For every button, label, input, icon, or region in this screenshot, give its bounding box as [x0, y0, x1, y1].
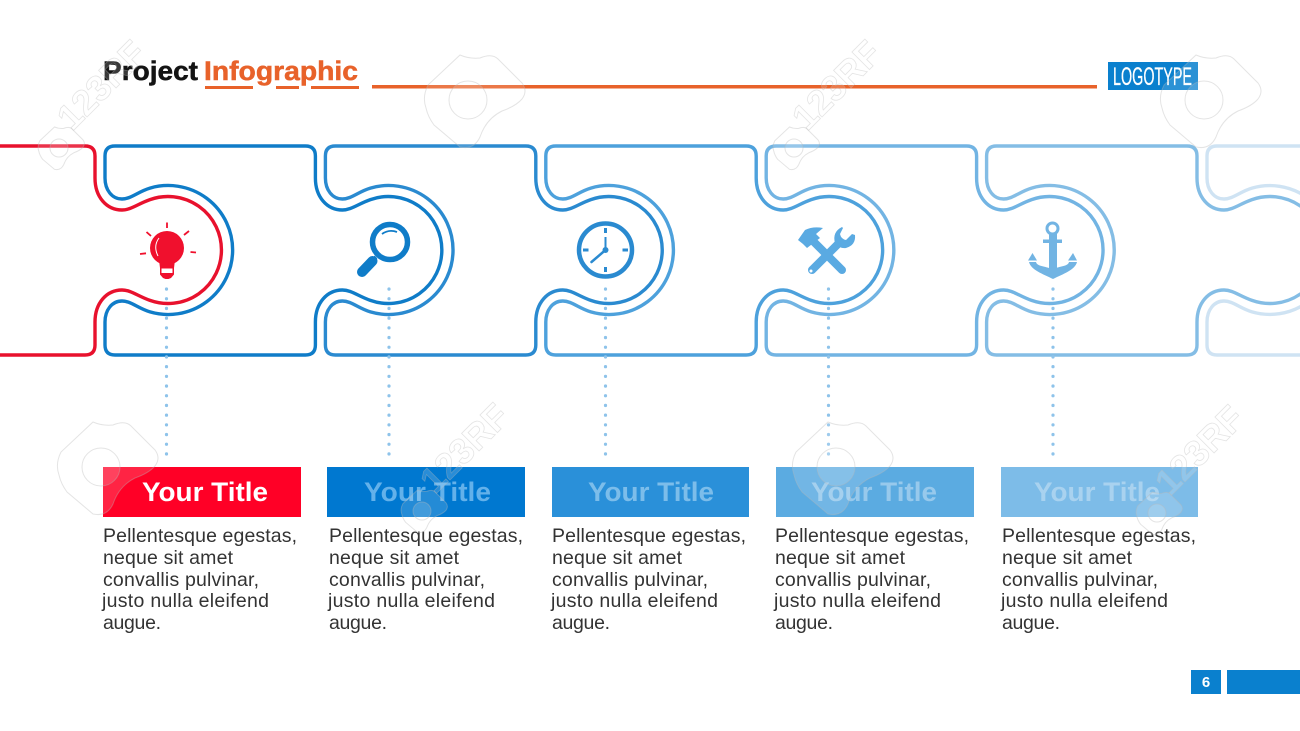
text block 4: Pellentesque egestas, [775, 525, 969, 547]
text block 4: justo nulla eleifend [773, 590, 941, 612]
icon: hammer and wrench [798, 227, 855, 272]
watermark overlay [38, 32, 1261, 535]
text block 5: augue. [1002, 612, 1060, 634]
puzzle piece 5: light blue [766, 146, 1103, 355]
logotype badge [1108, 62, 1198, 91]
text block 1: augue. [103, 612, 161, 634]
title box 1: Your Title [142, 477, 268, 507]
text block 5: justo nulla eleifend [1000, 590, 1168, 612]
dotted connector 3 [604, 289, 607, 456]
page number [1191, 670, 1300, 694]
text block 2: augue. [329, 612, 387, 634]
puzzle piece 4: mid blue [546, 146, 883, 355]
text block 2: Pellentesque egestas, [329, 525, 523, 547]
text block 1: Pellentesque egestas, [103, 525, 297, 547]
watermark overlay: 123RF [784, 32, 889, 138]
text block 2: convallis pulvinar, [329, 569, 485, 591]
title box 5: Your Title [1034, 477, 1160, 507]
text block 3: neque sit amet [552, 547, 683, 569]
dotted connector 5 [1051, 289, 1055, 456]
text block 4: augue. [775, 612, 833, 634]
watermark overlay: 123RF [1147, 397, 1252, 503]
text block 5: convallis pulvinar, [1002, 569, 1158, 591]
text block 3: justo nulla eleifend [550, 590, 718, 612]
dotted connector 2 [387, 289, 391, 456]
text block 3: convallis pulvinar, [552, 569, 708, 591]
page number: 6 [1202, 674, 1210, 691]
puzzle piece 2: strong blue [105, 146, 442, 355]
title box 3: Your Title [588, 477, 714, 507]
dotted connector 4 [827, 289, 830, 456]
text block 4: neque sit amet [775, 547, 906, 569]
title box 4: Your Title [811, 477, 937, 507]
text block 3: Pellentesque egestas, [552, 525, 746, 547]
title: Project Infographic: Infographic [204, 56, 358, 86]
text block 5 [1000, 525, 1196, 634]
puzzle piece: red [0, 146, 221, 355]
title box 2 [327, 467, 525, 517]
title box 3 [552, 467, 749, 517]
text block 3: augue. [552, 612, 610, 634]
text block 4 [773, 525, 969, 634]
logotype badge: LOGOTYPE [1113, 63, 1192, 91]
icon: light bulb [140, 222, 196, 279]
text block 2: neque sit amet [329, 547, 460, 569]
text block 1: convallis pulvinar, [103, 569, 259, 591]
title box 2: Your Title [364, 477, 491, 507]
text block 2 [327, 525, 523, 634]
watermark overlay: 123RF [412, 395, 517, 501]
title box 4 [776, 467, 974, 517]
text block 1: neque sit amet [103, 547, 234, 569]
icon: anchor [1028, 223, 1077, 279]
text block 1 [101, 525, 297, 634]
watermark overlay: 123RF [49, 32, 154, 138]
icon: clock [579, 224, 632, 276]
puzzle piece 3: blue [325, 146, 662, 355]
puzzle piece 7: faded, cut off at right edge [1207, 146, 1300, 355]
text block 5: Pellentesque egestas, [1002, 525, 1196, 547]
text block 2: justo nulla eleifend [327, 590, 495, 612]
header rule [372, 85, 1097, 88]
title box 5 [1001, 467, 1198, 517]
text block 5: neque sit amet [1002, 547, 1133, 569]
title: Project Infographic [103, 56, 359, 89]
title: Project Infographic: Project [103, 56, 198, 86]
title box 1 [103, 467, 301, 517]
dotted connector 1 [165, 289, 168, 456]
puzzle piece 6: paler blue [987, 146, 1300, 355]
icon: magnifying glass [362, 224, 408, 272]
text block 1: justo nulla eleifend [101, 590, 269, 612]
text block 4: convallis pulvinar, [775, 569, 931, 591]
text block 3 [550, 525, 746, 634]
